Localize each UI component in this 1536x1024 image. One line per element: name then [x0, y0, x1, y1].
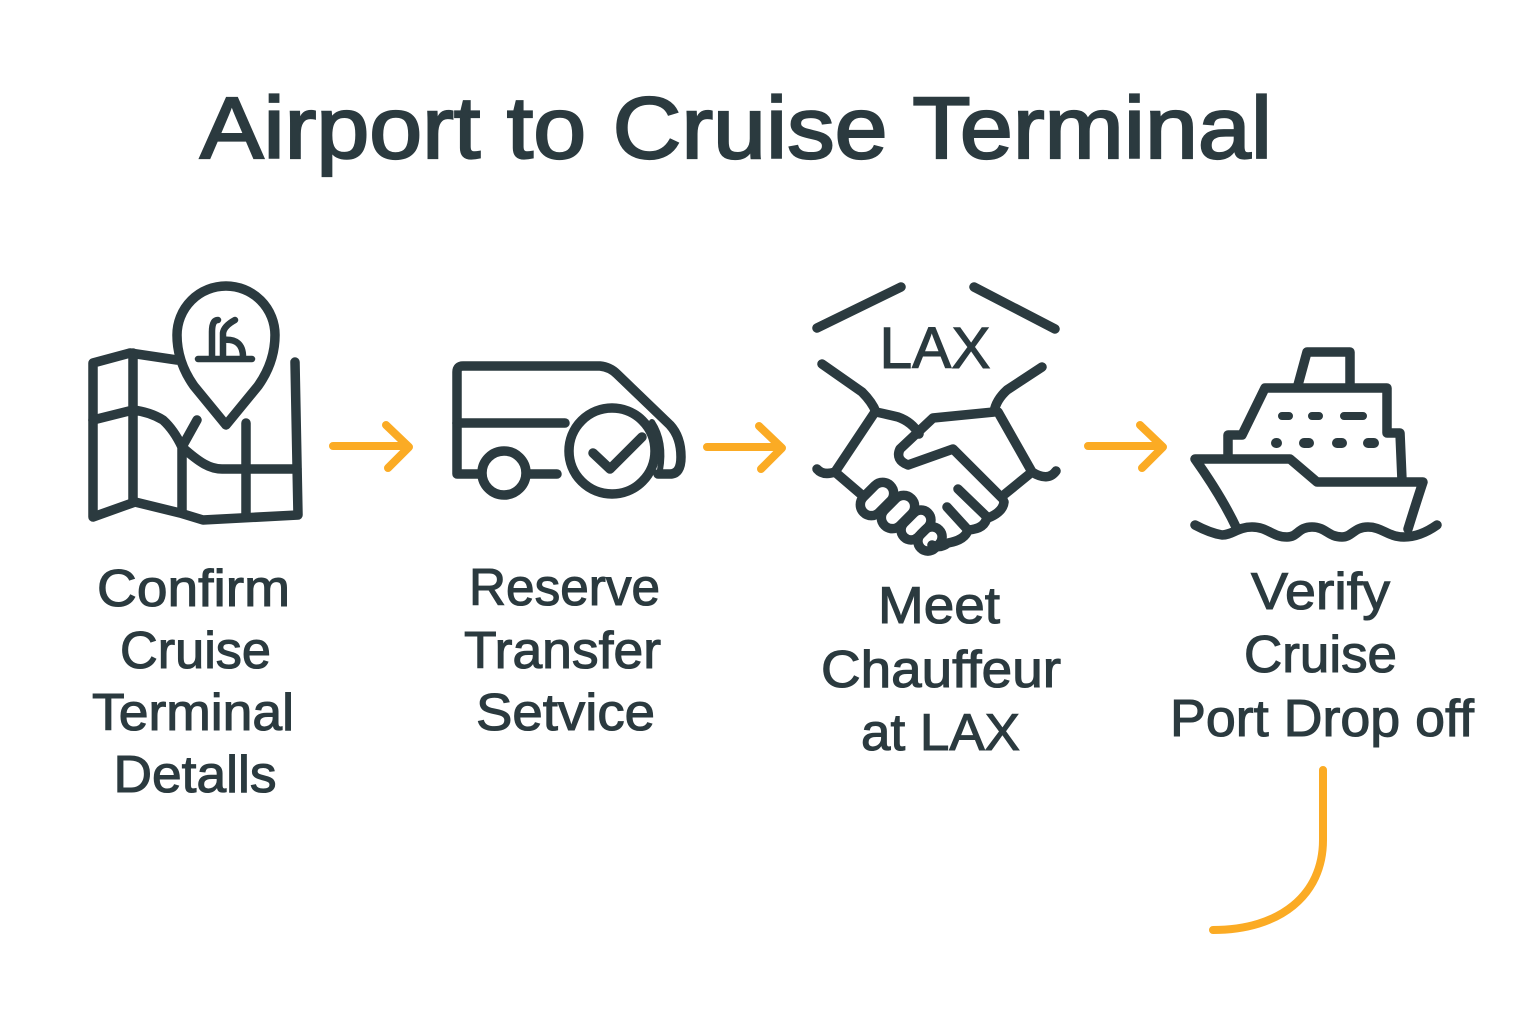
icon: LAX handshake: [817, 287, 1056, 555]
label: Verify Cruise Port Drop off: Cruise: [1244, 626, 1397, 684]
icon: van with check badge: [457, 366, 681, 495]
label: Meet Chauffeur at LAX: Meet: [878, 577, 1001, 635]
label: Reserve Transfer Service: Reserve: [469, 559, 660, 617]
curved arrow line: [1213, 770, 1323, 930]
label: Reserve Transfer Service: Setvice: [476, 684, 655, 742]
title: Airport to Cruise Terminal: [200, 80, 1272, 177]
label: Confirm Cruise Terminal Details: Detalls: [114, 746, 276, 804]
label: Confirm Cruise Terminal Details: Confirm: [97, 560, 290, 618]
label: Verify Cruise Port Drop off: Port Drop off: [1170, 690, 1475, 748]
arrow 2: [707, 426, 782, 469]
handshake: [817, 364, 1056, 555]
icon: cruise ship: [1195, 352, 1437, 537]
label: Verify Cruise Port Drop off: [1170, 563, 1475, 748]
label: Verify Cruise Port Drop off: Verify: [1251, 563, 1390, 621]
icon: map with location pin: [93, 286, 298, 520]
label: Meet Chauffeur at LAX: Chauffeur: [821, 641, 1061, 699]
label: Confirm Cruise Terminal Details: [92, 560, 294, 804]
LAX label: LAX: [880, 316, 990, 381]
label: Reserve Transfer Service: Transfer: [464, 622, 661, 680]
label: Confirm Cruise Terminal Details: Cruise: [120, 622, 271, 680]
label: Confirm Cruise Terminal Details: Terminal: [92, 684, 294, 742]
arrow 3: [1088, 425, 1163, 468]
roof lines: [817, 287, 1055, 329]
label: Meet Chauffeur at LAX: [821, 577, 1061, 762]
arrow 1: [333, 425, 409, 468]
label: Reserve Transfer Service: [464, 559, 661, 742]
label: Meet Chauffeur at LAX: at LAX: [861, 704, 1020, 762]
